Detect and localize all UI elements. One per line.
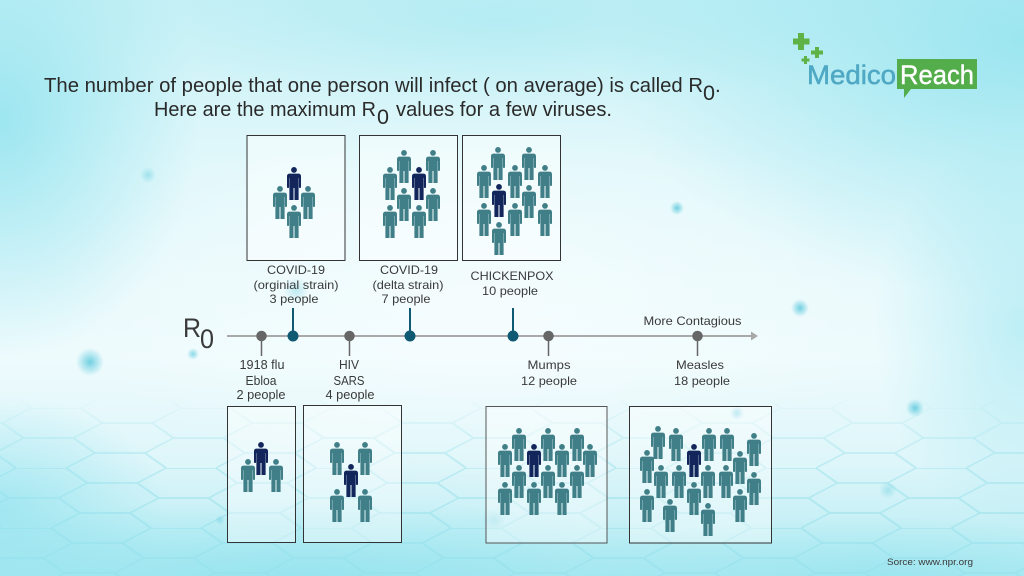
panel: mumps xyxy=(486,406,607,543)
label: Measles: 18 people xyxy=(674,374,730,388)
R0 axis label xyxy=(183,313,214,354)
title line 2: Here are the maximum R xyxy=(154,98,376,121)
title line 2 end: values for a few viruses. xyxy=(396,98,612,121)
logo: MedicoReach xyxy=(793,33,977,98)
label: chickenpox xyxy=(470,269,554,298)
label: COVID-19 original: 3 people xyxy=(270,292,319,306)
label: Mumps xyxy=(521,358,577,388)
label: HIV, SARS: 4 people xyxy=(326,388,375,402)
label: COVID-19 original: COVID-19 xyxy=(267,263,325,277)
logo word Reach: Reach xyxy=(900,60,974,90)
label: 1918 flu, Ebola: 2 people xyxy=(236,388,286,402)
R0 axis label: R xyxy=(183,313,201,343)
R0 axis label: 0 xyxy=(200,324,214,354)
label: 1918 flu, Ebola: 1918 flu xyxy=(240,358,285,372)
label: 1918 flu, Ebola: Ebloa xyxy=(246,374,277,388)
label: HIV, SARS: SARS xyxy=(334,374,364,388)
label: COVID-19 delta: (delta strain) xyxy=(372,278,444,292)
grey markers xyxy=(257,332,702,356)
teal markers xyxy=(288,308,518,340)
source note: Sorce: www.npr.org xyxy=(887,557,973,568)
title xyxy=(44,74,721,129)
label: More Contagious: More Contagious xyxy=(644,314,742,328)
label: COVID-19 original xyxy=(254,263,339,306)
logo word Medico: Medico xyxy=(807,60,896,90)
label: HIV, SARS: HIV xyxy=(339,358,360,372)
panel: chickenpox xyxy=(462,136,560,260)
label: Measles: Measles xyxy=(676,358,724,372)
logo speech box xyxy=(897,59,977,98)
label: HIV, SARS xyxy=(326,358,375,402)
title subscript 1: 0 xyxy=(703,82,715,105)
logo crosses xyxy=(793,33,823,64)
timeline axis xyxy=(227,308,758,356)
label: COVID-19 delta: 7 people xyxy=(382,292,431,306)
label: chickenpox: 10 people xyxy=(482,284,538,298)
label: Mumps: Mumps xyxy=(528,358,570,372)
label: Mumps: 12 people xyxy=(521,374,577,388)
panel: HIV and SARS xyxy=(304,406,402,542)
title period: . xyxy=(715,74,721,97)
panel: 1918 flu and Ebola xyxy=(228,406,296,542)
label: 1918 flu, Ebola xyxy=(236,358,286,402)
title line 1: The number of people that one person will infect ( on average) is called R xyxy=(44,74,703,97)
label: COVID-19 delta xyxy=(372,263,444,306)
label: COVID-19 original: (orginial strain) xyxy=(254,278,339,292)
panel: COVID-19 original strain xyxy=(247,136,345,260)
label: COVID-19 delta: COVID-19 xyxy=(380,263,438,277)
panel: measles xyxy=(630,406,772,543)
label: chickenpox: CHICKENPOX xyxy=(470,269,554,283)
panel: COVID-19 delta strain xyxy=(360,136,458,260)
label: Measles xyxy=(674,358,730,388)
title subscript 2: 0 xyxy=(377,106,389,129)
